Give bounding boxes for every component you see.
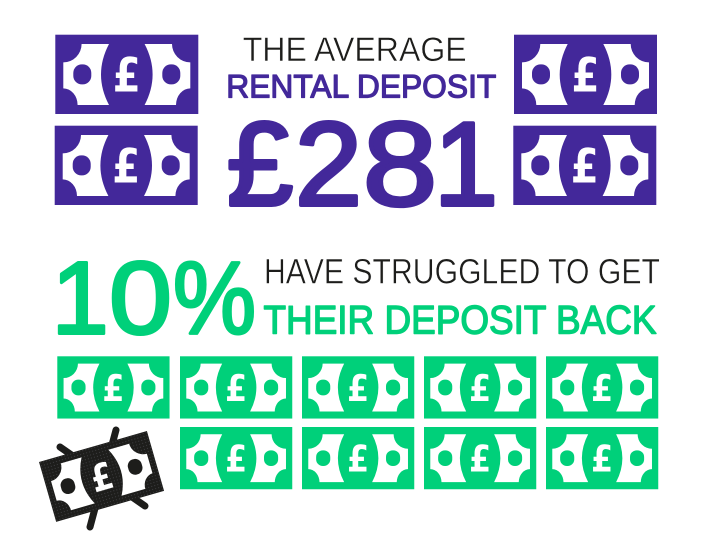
icon: purple banknote lower right: £ <box>571 140 599 195</box>
heading: rental deposit: RENTAL DEPOSIT <box>226 69 496 105</box>
icon: crossed-out black banknote: £ <box>85 454 118 501</box>
figure: £281: 8 <box>363 98 437 231</box>
icon: green banknote row 2 column 2: £ <box>225 438 247 481</box>
figure: 10%: % <box>173 240 256 356</box>
figure: £281 <box>227 98 498 231</box>
heading: their deposit back: THEIR DEPOSIT BACK <box>264 298 657 342</box>
figure: 10% <box>52 240 256 356</box>
icon: purple banknote lower left <box>55 126 198 205</box>
heading: have struggled to get: HAVE STRUGGLED TO GET <box>264 252 660 291</box>
icon: green banknote row 2 column 5: £ <box>591 438 613 481</box>
figure: £281: 2 <box>295 98 362 231</box>
icon: green banknote row 2 column 2 <box>180 427 292 489</box>
icon: green banknote row 1 column 4 <box>424 356 536 419</box>
icon: purple banknote top right: £ <box>572 49 600 104</box>
icon: green banknote row 1 column 2: £ <box>225 367 247 410</box>
heading: the average: THE AVERAGE <box>243 31 467 69</box>
icon: purple banknote lower right <box>513 126 656 205</box>
icon: green banknote row 1 column 1 <box>57 356 170 419</box>
icon: green banknote row 1 column 4: £ <box>469 367 491 410</box>
icon: purple banknote top right <box>514 35 657 114</box>
icon: crossed-out black banknote <box>39 430 164 527</box>
icon: green banknote row 1 column 3 <box>302 356 414 419</box>
icon: green banknote row 1 column 5: £ <box>591 367 613 410</box>
figure: 10%: 1 <box>52 240 109 356</box>
figure: £281: 1 <box>434 98 498 231</box>
icon: purple banknote top left <box>55 35 198 114</box>
icon: green banknote row 2 column 4: £ <box>469 438 491 481</box>
icon: purple banknote top left: £ <box>113 49 141 104</box>
icon: green banknote row 2 column 3: £ <box>347 438 369 481</box>
figure: £281: £ <box>227 98 293 231</box>
icon: green banknote row 1 column 3: £ <box>347 367 369 410</box>
icon: green banknote row 1 column 5 <box>546 356 658 419</box>
icon: green banknote row 2 column 4 <box>424 427 536 489</box>
icon: purple banknote lower left: £ <box>112 140 140 195</box>
figure: 10%: 0 <box>109 240 172 356</box>
icon: green banknote row 2 column 3 <box>302 427 414 489</box>
icon: green banknote row 1 column 1: £ <box>102 367 124 410</box>
icon: green banknote row 2 column 5 <box>546 427 658 489</box>
icon: green banknote row 1 column 2 <box>180 356 292 419</box>
